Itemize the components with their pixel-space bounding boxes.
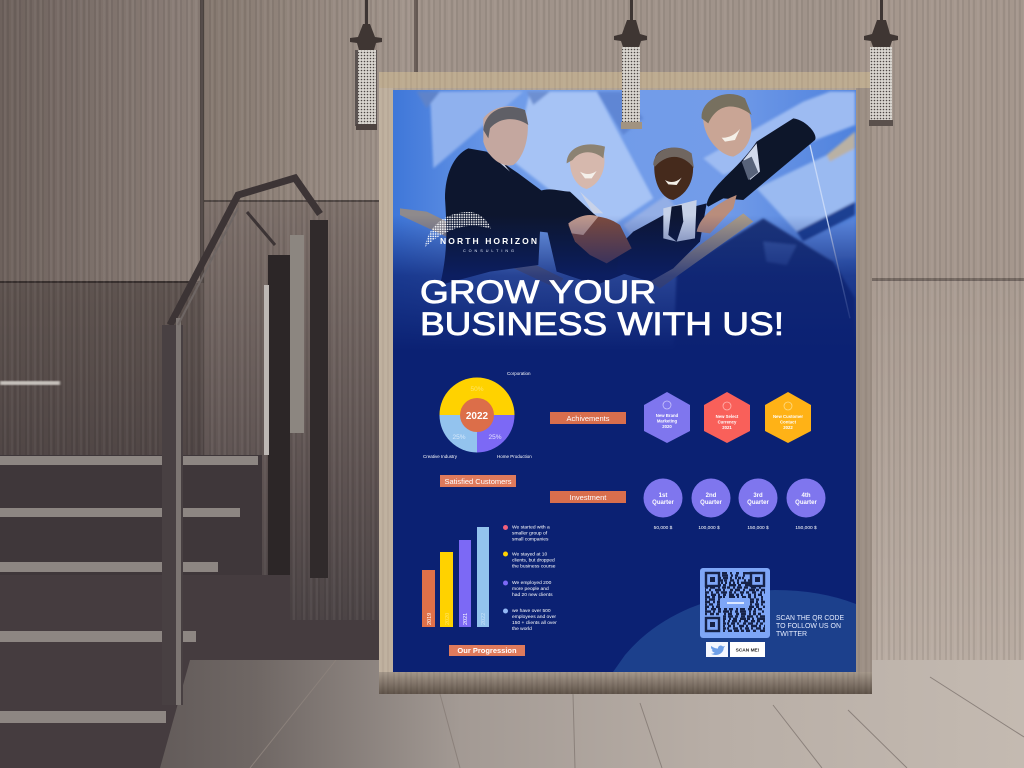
progression notes: 150 + clients all over [512, 620, 557, 626]
hexagon: New Brand Marketing: Marketing [657, 418, 678, 424]
label: Satisfied Customers: Satisfied Customers [444, 477, 512, 486]
woman [538, 189, 630, 285]
investment quarter: 4th: 4th [802, 493, 811, 499]
donut chart: 2022 market split: Home Production [497, 454, 532, 459]
hexagon: New Select Currency: 2021 [722, 425, 732, 430]
investment quarter: 3rd: 3rd [753, 493, 763, 499]
decorative corner curve [613, 590, 856, 672]
Scan me tag: SCAN ME! [736, 648, 760, 654]
floor [0, 660, 1024, 768]
label: Achivements: Achivements [567, 414, 610, 423]
poster [393, 90, 856, 672]
donut chart: 2022 market split: 25% [452, 434, 466, 441]
hexagon: New Select Currency: Currency [718, 420, 737, 424]
donut chart: 2022 market split [423, 371, 532, 459]
hexagon: New Select Currency: New Select [716, 414, 739, 419]
Twitter tag [706, 642, 728, 657]
label: Our Progression [449, 645, 525, 656]
progression notes: the business course [512, 564, 556, 570]
logo: North Horizon Consulting [425, 212, 537, 253]
progression notes: We employed 200 [512, 580, 552, 586]
donut chart: 2022 market split: Creative Industry [423, 454, 458, 459]
bar chart: progression by year: 2022 [481, 613, 487, 625]
investment quarter: 1st [644, 478, 682, 531]
billboard frame [379, 72, 872, 694]
hexagon: New Customer Contact: New Customer [773, 414, 803, 419]
bar chart: progression by year: 2021 [463, 613, 469, 625]
bar chart: progression by year: 2020 [445, 613, 451, 625]
hexagon: New Customer Contact [765, 392, 811, 443]
hexagon: New Customer Contact: Contact [780, 420, 797, 424]
investment quarter: 2nd [692, 478, 730, 531]
label: Investment [550, 491, 626, 503]
Scan me tag [730, 642, 765, 657]
logo: North Horizon Consulting: CONSULTING [463, 249, 514, 253]
title: BUSINESS WITH US! [420, 306, 784, 342]
hexagon: New Brand Marketing: New Brand [656, 413, 679, 418]
logo: North Horizon Consulting: NORTH HORIZON [440, 236, 537, 246]
progression notes: employees and over [512, 614, 556, 620]
hexagon: New Brand Marketing [644, 392, 690, 443]
investment quarter: 2nd: Quarter [700, 500, 722, 506]
bar chart: progression by year: 2019 [427, 613, 433, 625]
title: GROW YOUR [420, 274, 656, 310]
investment quarter: 3rd: 150,000 $ [747, 525, 769, 531]
hexagon: New Customer Contact: 2022 [783, 425, 793, 430]
progression notes: more people and [512, 586, 549, 592]
investment quarter: 3rd: Quarter [747, 500, 769, 506]
investment quarter: 4th: 150,000 $ [795, 525, 817, 531]
investment quarter: 1st: 1st [659, 493, 667, 499]
label: Investment: Investment [570, 493, 607, 502]
progression notes [503, 524, 557, 632]
QR caption: TWITTER [776, 631, 807, 638]
progression notes: we have over 500 [512, 608, 551, 614]
donut chart: 2022 market split: 25% [488, 434, 502, 441]
lamp: right [864, 0, 898, 126]
progression notes: We stayed at 10 [512, 552, 548, 558]
QR code card [700, 568, 770, 638]
label: Our Progression: Our Progression [457, 646, 517, 655]
fourth man [707, 118, 816, 207]
donut chart: 2022 market split: 2022 [466, 411, 489, 422]
progression notes: the world [512, 626, 532, 632]
progression notes: clients, but dropped [512, 558, 555, 564]
label: Satisfied Customers [440, 475, 516, 487]
hexagon: New Select Currency [704, 392, 750, 443]
investment quarter: 1st: 50,000 $ [654, 525, 673, 531]
lamp: left [350, 0, 382, 130]
man 1 [441, 148, 548, 284]
third man [617, 203, 707, 282]
investment quarter: 2nd: 2nd [706, 493, 717, 499]
QR caption [776, 615, 844, 638]
lamp: center [614, 0, 647, 129]
QR caption: SCAN THE QR CODE [776, 615, 844, 622]
label: Achivements [550, 412, 626, 424]
progression notes: We started with a [512, 524, 550, 530]
donut chart: 2022 market split: 50% [470, 386, 484, 393]
bar chart: progression by year [422, 527, 489, 627]
investment quarter: 4th: Quarter [795, 500, 817, 506]
donut chart: 2022 market split: Corporation [507, 371, 531, 376]
investment quarter: 1st: Quarter [652, 500, 674, 506]
progression notes: smaller group of [512, 530, 548, 536]
progression notes: small companies [512, 536, 549, 542]
hero photo: four business people stacking hands [393, 90, 856, 355]
QR caption: TO FOLLOW US ON [776, 623, 841, 630]
investment quarter: 3rd [738, 478, 778, 531]
progression notes: had 20 new clients [512, 592, 553, 598]
stacked hands [568, 216, 632, 263]
staircase [0, 178, 380, 768]
title [421, 280, 782, 336]
investment quarter: 4th [786, 478, 826, 531]
hexagon: New Brand Marketing: 2020 [662, 424, 672, 429]
investment quarter: 2nd: 100,000 $ [698, 525, 720, 531]
